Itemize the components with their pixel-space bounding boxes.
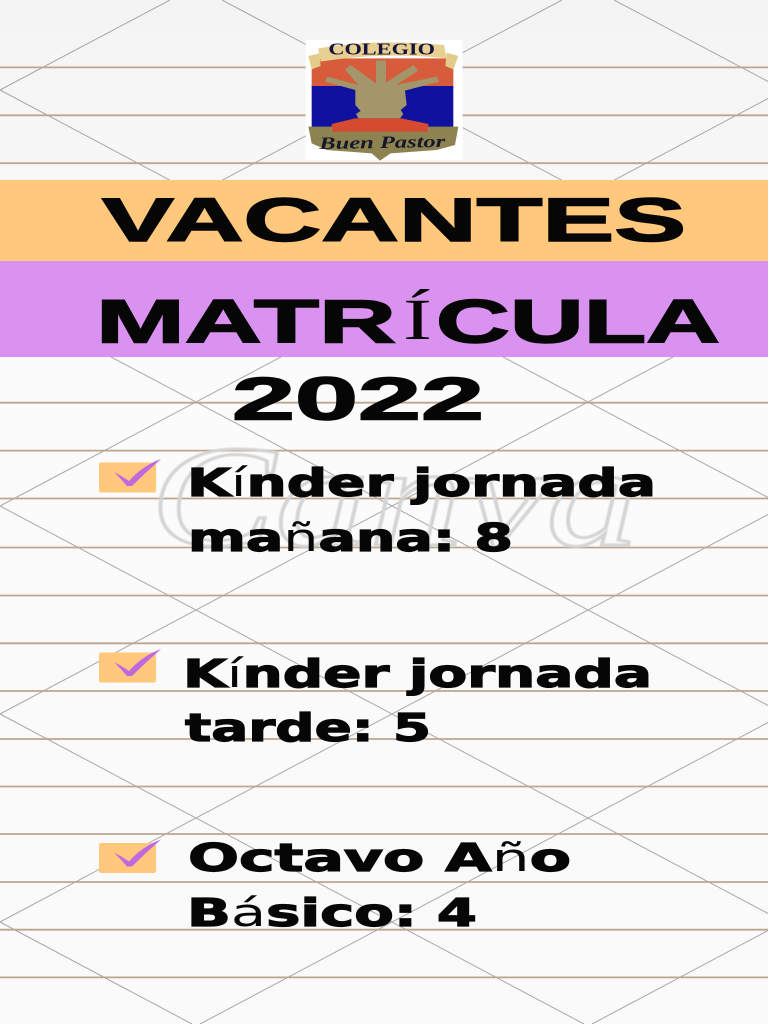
item 1: Kinder jornada manana: K índer jornada (187, 461, 656, 505)
logo: Colegio Buen Pastor crest: COLEGIO (328, 39, 435, 58)
heading: 2022: 2022 (232, 366, 484, 432)
item 1: Kinder jornada manana (99, 459, 656, 560)
item 1: Kinder jornada manana: ma ñ ana: 8 (188, 516, 513, 560)
item 3: Octavo Ano Basico: Octavo A ñ o (188, 836, 571, 880)
logo: Colegio Buen Pastor crest: Buen Pastor (318, 132, 446, 153)
watermark: Canva: Canva (150, 417, 640, 577)
icon: checkbox 1 (99, 459, 161, 492)
item 2: Kinder jornada tarde (99, 649, 652, 750)
heading: VACANTES: VACANTES (102, 186, 686, 254)
logo: Colegio Buen Pastor crest (306, 39, 463, 161)
icon: checkbox 3 (99, 840, 161, 873)
heading: MATRÍCULA: Í (403, 287, 432, 352)
heading: MATRÍCULA (96, 287, 720, 356)
item 2: Kinder jornada tarde: tarde: 5 (185, 706, 431, 750)
heading: MATRÍCULA: MATR (96, 288, 396, 356)
item 3: Octavo Ano Basico (99, 836, 571, 935)
orange band (0, 180, 768, 261)
item 3: Octavo Ano Basico: B á sico: 4 (187, 891, 477, 935)
item 2: Kinder jornada tarde: K índer jornada (183, 652, 652, 696)
icon: checkbox 2 (99, 649, 161, 682)
purple band (0, 261, 768, 357)
heading: MATRÍCULA: CULA (436, 288, 720, 356)
